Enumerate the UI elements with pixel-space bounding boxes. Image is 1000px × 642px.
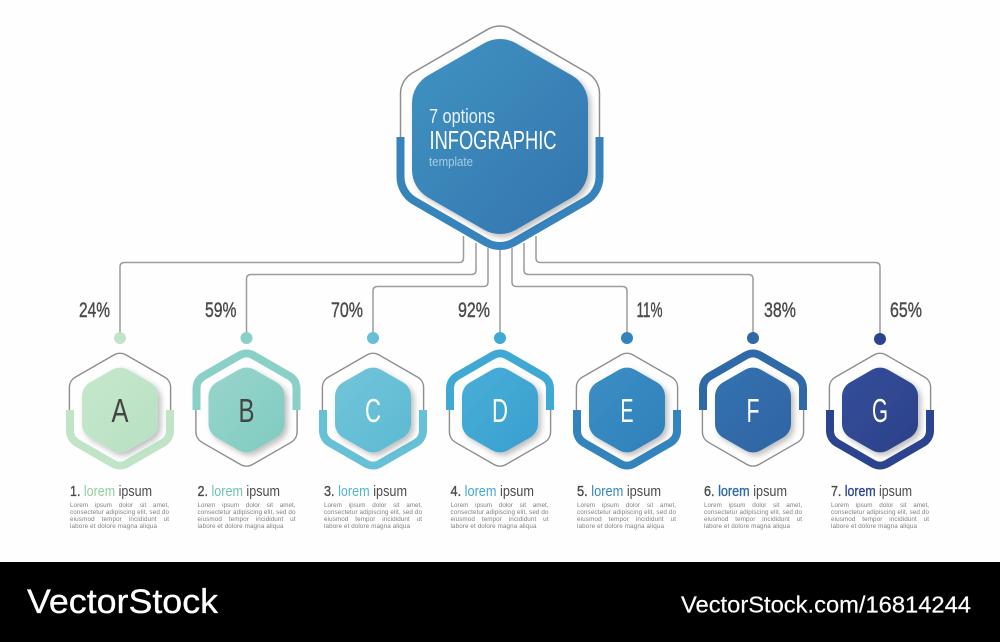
body: labore et dolore magna aliqua (831, 523, 917, 530)
dot (621, 332, 633, 344)
heading: 1. lorem ipsum (70, 483, 152, 500)
dot (494, 332, 506, 344)
option E caption (577, 483, 676, 530)
hexagon (335, 368, 411, 452)
heading: 6. lorem ipsum (704, 483, 787, 500)
body: Lorem ipsum dolor sit amet, (198, 502, 296, 509)
band (450, 353, 550, 410)
band (703, 353, 803, 410)
body: labore et dolore magna aliqua (198, 523, 284, 530)
dot (367, 332, 379, 344)
option A caption (70, 483, 169, 530)
heading: 2. lorem ipsum (198, 483, 280, 500)
connector lines (120, 236, 880, 334)
outline (69, 353, 171, 466)
body: Lorem ipsum dolor sit amet, (324, 502, 422, 509)
body: consectetur adipiscing elit, sed do (198, 509, 296, 516)
percent: 38% (764, 299, 796, 322)
line: INFOGRAPHIC: INFOGRAPHIC (430, 125, 556, 155)
option F caption (704, 483, 802, 530)
outline (322, 353, 424, 466)
body (198, 502, 296, 530)
dot (747, 332, 759, 344)
option D caption (450, 483, 549, 530)
body: Lorem ipsum dolor sit amet, (704, 502, 802, 509)
option B caption (198, 483, 296, 530)
hexagon (462, 368, 538, 452)
main hexagon outline (400, 26, 600, 140)
option G caption (831, 483, 929, 530)
hexagon (589, 368, 665, 452)
body: labore et dolore magna aliqua (324, 523, 410, 530)
body (704, 502, 802, 530)
body: consectetur adipiscing elit, sed do (577, 509, 676, 516)
letter: F (747, 392, 759, 429)
footer image id: VectorStock.com/16814244 (681, 592, 971, 618)
body: Lorem ipsum dolor sit amet, (831, 502, 929, 509)
percent: 70% (331, 299, 363, 322)
option G (829, 299, 931, 466)
body: eiusmod tempor incididunt ut (450, 516, 549, 523)
hexagon (82, 368, 158, 452)
letter: A (112, 392, 128, 429)
body (324, 502, 422, 530)
outline (702, 353, 804, 466)
outline (449, 353, 551, 466)
main hexagon fill (412, 39, 588, 234)
dot (114, 332, 126, 344)
body: consectetur adipiscing elit, sed do (70, 509, 169, 516)
option D (449, 299, 551, 466)
option E (576, 299, 678, 466)
line: 7 options: 7 options (429, 106, 495, 128)
body: consectetur adipiscing elit, sed do (704, 509, 802, 516)
body: labore et dolore magna aliqua (577, 523, 664, 530)
letter: C (365, 392, 381, 429)
option C (322, 299, 424, 466)
outline (576, 353, 678, 466)
band (196, 353, 296, 410)
footer brand: VectorStock (27, 583, 219, 621)
body: Lorem ipsum dolor sit amet, (70, 502, 169, 509)
body (831, 502, 929, 530)
letter: D (492, 392, 508, 429)
percent: 11% (636, 299, 662, 322)
hexagon (208, 368, 284, 452)
heading: 5. lorem ipsum (577, 483, 661, 500)
body (577, 502, 676, 530)
option F (702, 299, 804, 466)
body (450, 502, 549, 530)
body: consectetur adipiscing elit, sed do (450, 509, 549, 516)
body: Lorem ipsum dolor sit amet, (450, 502, 549, 509)
main title text (429, 106, 556, 169)
band (830, 410, 930, 466)
band (323, 410, 423, 466)
body: eiusmod tempor incididunt ut (704, 516, 802, 523)
outline (196, 353, 297, 466)
option B (196, 299, 297, 466)
percent: 24% (79, 299, 110, 322)
body: eiusmod tempor incididunt ut (70, 516, 169, 523)
body (70, 502, 169, 530)
body: labore et dolore magna aliqua (70, 523, 157, 530)
hexagon (842, 368, 918, 452)
body: labore et dolore magna aliqua (704, 523, 790, 530)
footer bar (0, 562, 1000, 642)
band (577, 410, 677, 466)
body: eiusmod tempor incididunt ut (324, 516, 422, 523)
percent: 65% (890, 299, 922, 322)
percent: 59% (205, 299, 236, 322)
hexagon (715, 368, 791, 452)
body: Lorem ipsum dolor sit amet, (577, 502, 676, 509)
body: eiusmod tempor incididunt ut (577, 516, 676, 523)
body: eiusmod tempor incididunt ut (831, 516, 929, 523)
percent: 92% (458, 299, 490, 322)
main hexagon (400, 26, 600, 246)
option A (69, 299, 171, 466)
heading: 4. lorem ipsum (450, 483, 534, 500)
letter: B (238, 392, 254, 429)
letter: G (872, 392, 888, 429)
body: consectetur adipiscing elit, sed do (831, 509, 929, 516)
body: consectetur adipiscing elit, sed do (324, 509, 422, 516)
body: eiusmod tempor incididunt ut (198, 516, 296, 523)
dot (240, 332, 252, 344)
dot (874, 333, 886, 345)
outline (829, 353, 931, 466)
band (70, 410, 170, 466)
line: template: template (429, 154, 473, 169)
heading: 7. lorem ipsum (831, 483, 912, 500)
main hexagon band (400, 137, 600, 246)
body: labore et dolore magna aliqua (450, 523, 537, 530)
heading: 3. lorem ipsum (324, 483, 407, 500)
letter: E (621, 392, 633, 429)
option C caption (324, 483, 422, 530)
